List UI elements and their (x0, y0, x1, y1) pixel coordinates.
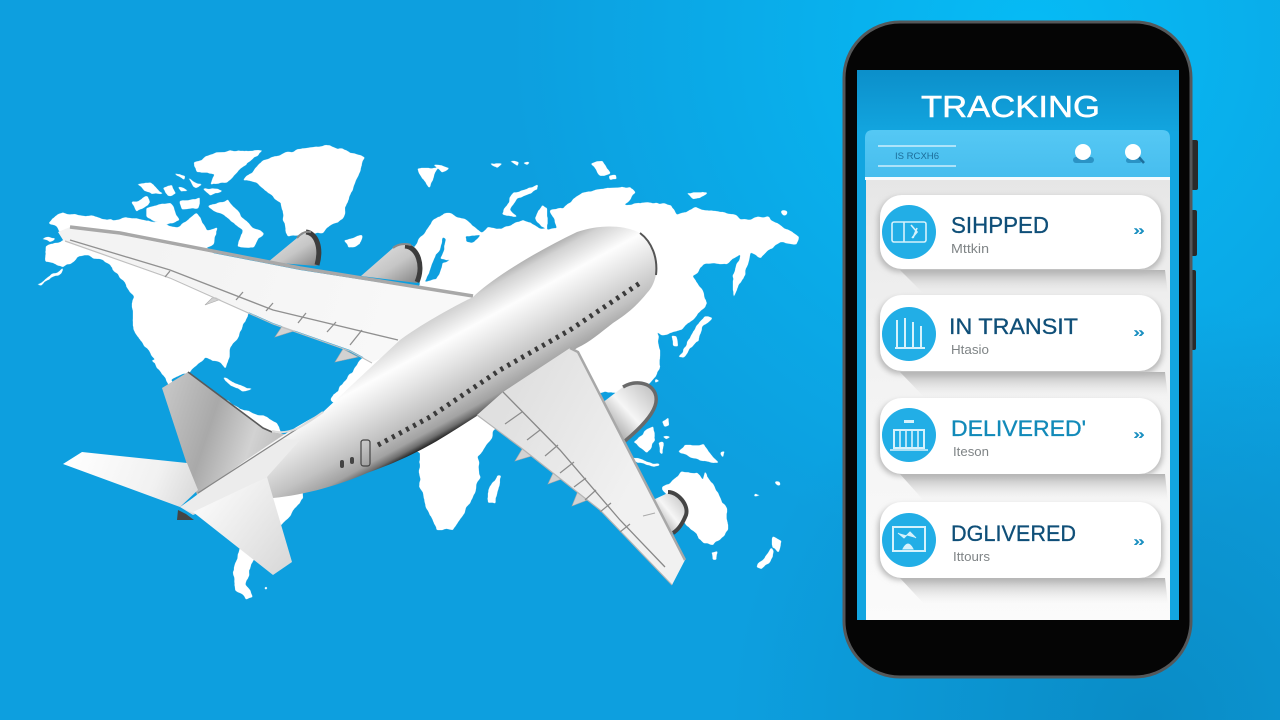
airplane (58, 226, 687, 585)
delivered chevron: » (1133, 426, 1145, 443)
icon: in transit (882, 307, 936, 361)
tail cone tip (177, 510, 194, 520)
heading: TRACKING: TRACKING (921, 89, 1100, 124)
shipped chevron: » (1133, 222, 1145, 239)
fuselage (177, 226, 657, 520)
map: Greenland (243, 145, 365, 237)
in transit chevron: » (1133, 324, 1145, 341)
engine: lower outer (653, 492, 687, 533)
map: Central and South America (152, 360, 303, 599)
lower wing (477, 348, 685, 585)
engine: upper left (268, 232, 320, 266)
card: delivered (878, 398, 1168, 502)
phone body (844, 22, 1191, 677)
search bar (865, 130, 1170, 180)
wing pylons (205, 297, 590, 506)
in transit title: IN TRANSIT (949, 314, 1078, 339)
delivered second subtitle: Ittours (953, 550, 990, 564)
horizontal stabilizer: left (63, 452, 198, 507)
icon: delivered (882, 408, 936, 462)
delivered subtitle: Iteson (953, 445, 989, 459)
delivered title: DELIVERED' (951, 416, 1086, 441)
phone (844, 22, 1198, 677)
map: Australia (663, 472, 727, 545)
shipped title: SIHPPED (951, 212, 1049, 238)
icon: search (1125, 144, 1144, 163)
tail cone strip (181, 439, 300, 513)
world map (37, 145, 800, 599)
card: in transit (878, 295, 1168, 398)
map: Southeast Asia (628, 379, 726, 467)
map: Eurasia (330, 187, 800, 530)
icon: delivered second (882, 513, 936, 567)
map: North America (45, 213, 263, 380)
card: delivered second (878, 502, 1168, 605)
delivered second chevron: » (1133, 533, 1145, 550)
map: southern islands (223, 378, 782, 590)
screen content background (866, 178, 1170, 620)
search bar label: IS RCXH6 (895, 151, 939, 161)
horizontal stabilizer: right (193, 477, 292, 575)
card: shipped (878, 195, 1168, 295)
in transit subtitle: Htasio (951, 343, 989, 357)
delivered second title: DGLIVERED (951, 521, 1076, 546)
icon: user (1073, 144, 1094, 163)
upper wing (58, 227, 473, 363)
icon: shipped (882, 205, 936, 259)
map: Arctic islands (37, 150, 787, 285)
map: Japan and Korea (672, 317, 713, 357)
shipped subtitle: Mttkin (951, 242, 989, 256)
phone side buttons (1191, 140, 1198, 350)
vertical tail fin (162, 372, 323, 495)
engine: upper right (361, 244, 422, 283)
phone screen (857, 70, 1179, 620)
rear windows and door (340, 440, 370, 468)
cabin windows (378, 283, 640, 445)
engine: lower inner (602, 383, 656, 442)
